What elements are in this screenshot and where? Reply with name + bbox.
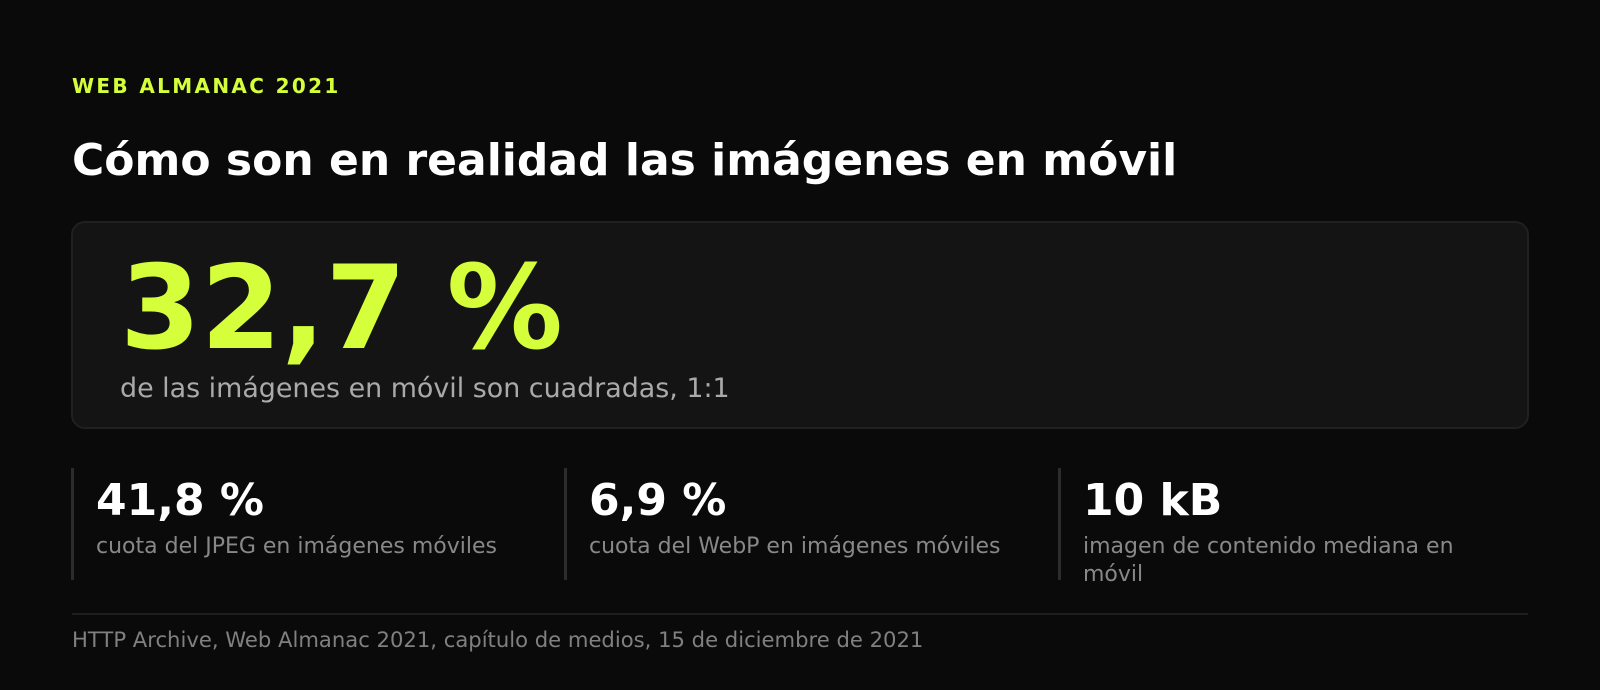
value: 41,8 % xyxy=(96,475,264,526)
stat: JPEG xyxy=(71,468,519,580)
hero number: 32,7 % xyxy=(120,241,563,376)
label: cuota del JPEG en imágenes móviles xyxy=(96,534,497,559)
value: 6,9 % xyxy=(589,475,726,526)
label: cuota del WebP en imágenes móviles xyxy=(589,534,1000,559)
stat: median image xyxy=(1058,468,1506,580)
source line: HTTP Archive, Web Almanac 2021, capítulo de medios, 15 de diciembre de 2021 xyxy=(72,627,923,652)
label: imagen de contenido mediana en móvil xyxy=(1083,534,1454,587)
panel: hero stat xyxy=(71,221,1529,429)
eyebrow: WEB ALMANAC 2021 xyxy=(72,74,341,98)
value: 10 kB xyxy=(1083,475,1222,526)
title: Cómo son en realidad las imágenes en móvil xyxy=(72,135,1177,186)
hero caption: de las imágenes en móvil son cuadradas, 1:1 xyxy=(120,373,730,404)
stat: WebP xyxy=(564,468,1012,580)
